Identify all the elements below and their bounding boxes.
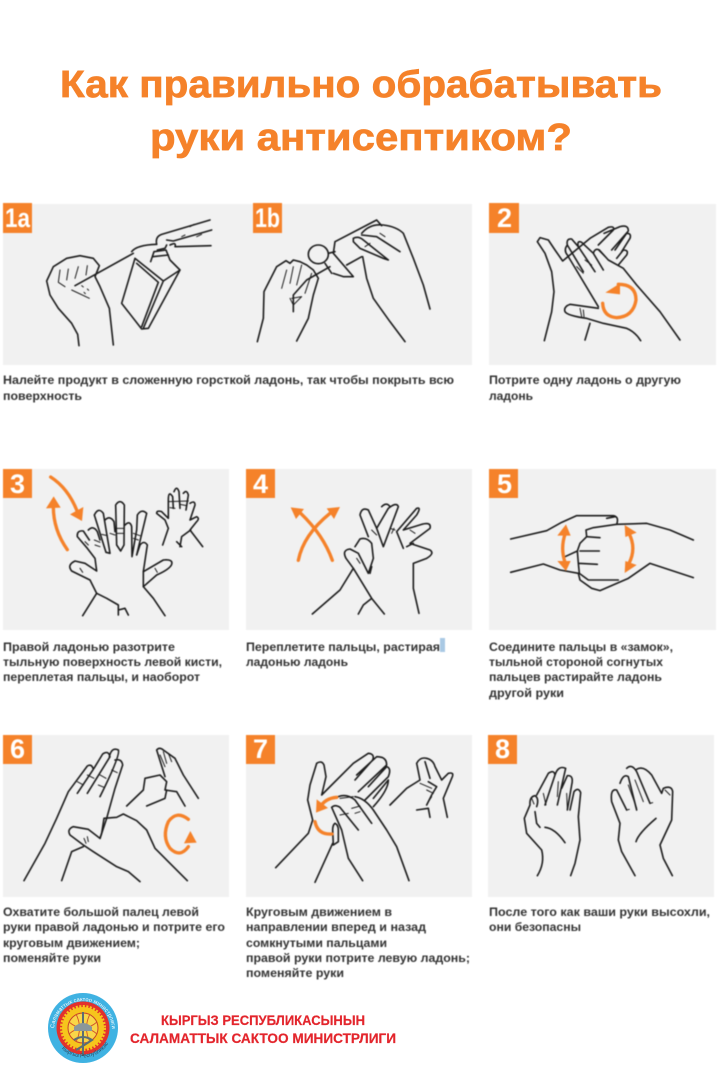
badge 6: [3, 734, 32, 764]
ministry name: КЫРГЫЗ РЕСПУБЛИКАСЫНЫН: [161, 1013, 365, 1028]
caption 4: Переплетите пальцы, растирая: [246, 640, 440, 654]
ministry name: [130, 1013, 396, 1046]
panel: step 5: [489, 469, 716, 700]
illustration: rubbing fingertips on palm: [276, 753, 453, 882]
caption 1: Налейте продукт в сложенную горсткой ладонь, так чтобы покрыть всю: [3, 373, 454, 387]
panel: step 6: [3, 734, 229, 965]
caption 7: поменяйте руки: [246, 966, 344, 980]
badge 3: 3: [10, 469, 25, 499]
caption 5: тыльной стороной согнутых: [489, 655, 663, 669]
panel: step 2: [489, 203, 716, 403]
caption 1: [3, 373, 454, 403]
caption 4: ладонью ладонь: [246, 655, 348, 669]
panel: step 1a and 1b: [3, 203, 472, 403]
caption 5: другой руки: [489, 686, 564, 700]
caption 7: направлении вперед и назад: [246, 920, 426, 934]
caption 3: переплетая пальцы, и наоборот: [3, 670, 200, 684]
caption 5: [489, 640, 673, 700]
caption 8: они безопасны: [489, 920, 581, 934]
badge 7: 7: [253, 734, 268, 764]
illustration: interlaced palms: [291, 504, 432, 614]
caption 5: Соедините пальцы в «замок»,: [489, 640, 673, 654]
caption 2: [489, 373, 681, 403]
caption 6: руки правой ладонью и потрите его: [3, 920, 225, 934]
badge 3: [3, 469, 32, 499]
caption 3: [3, 640, 222, 684]
caption 8: [489, 905, 710, 934]
caption 3: тыльную поверхность левой кисти,: [3, 655, 222, 669]
panel: step 7: [246, 734, 472, 980]
badge 7: [246, 734, 275, 764]
caption 5: пальцев растирайте ладонь: [489, 670, 662, 684]
illustration: rubbing thumb: [24, 748, 198, 882]
ministry name: САЛАМАТТЫК САКТОО МИНИСТРЛИГИ: [130, 1031, 396, 1046]
title: руки антисептиком?: [150, 117, 572, 159]
badge 2: [489, 203, 519, 233]
illustration: dry open hands: [524, 766, 673, 876]
caption 3: Правой ладонью разотрите: [3, 640, 175, 654]
logo: ministry emblem: Саламаттык сактоо министрлиги: [50, 998, 115, 1028]
illustration: bottle tipped into hand: [257, 220, 430, 342]
panel: step 8: [488, 734, 714, 934]
caption 7: Круговым движением в: [246, 905, 392, 919]
caption 7: правой руки потрите левую ладонь;: [246, 951, 470, 965]
caption 8: После того как ваши руки высохли,: [489, 905, 710, 919]
illustration: pump bottle and cupped hand: [47, 220, 212, 346]
badge 8: [488, 734, 517, 764]
badge 4: [246, 469, 275, 499]
caption 2: Потрите одну ладонь о другую: [489, 373, 681, 387]
panel: step 3: [3, 469, 229, 684]
illustration: rubbing palms: [537, 226, 680, 341]
badge 2: 2: [497, 203, 512, 233]
caption 6: поменяйте руки: [3, 951, 101, 965]
logo: ministry emblem: [48, 993, 118, 1063]
caption 7: сомкнутыми пальцами: [246, 936, 387, 950]
caption 2: ладонь: [489, 389, 533, 403]
badge 8: 8: [495, 734, 510, 764]
badge 5: [489, 469, 518, 499]
badge 1b: 1b: [255, 203, 280, 233]
text selection marker: [440, 638, 445, 652]
badge 4: 4: [253, 469, 268, 499]
caption 6: Охватите большой палец левой: [3, 905, 199, 919]
title: Как правильно обрабатывать: [60, 64, 662, 106]
caption 4: [246, 640, 440, 669]
badge 5: 5: [497, 469, 512, 499]
caption 7: [246, 905, 470, 980]
illustration: interlaced fingers back of hand: [46, 477, 203, 616]
title: [60, 64, 662, 159]
badge 6: 6: [10, 734, 25, 764]
caption 1: поверхность: [3, 389, 82, 403]
panel: step 4: [246, 469, 472, 669]
caption 6: [3, 905, 225, 965]
illustration: interlocked fingers: [511, 516, 693, 591]
logo: ministry emblem: Кыргыз Республикасы: [62, 1042, 108, 1058]
caption 6: круговым движением;: [3, 936, 140, 950]
badge 1a: 1a: [5, 203, 31, 233]
